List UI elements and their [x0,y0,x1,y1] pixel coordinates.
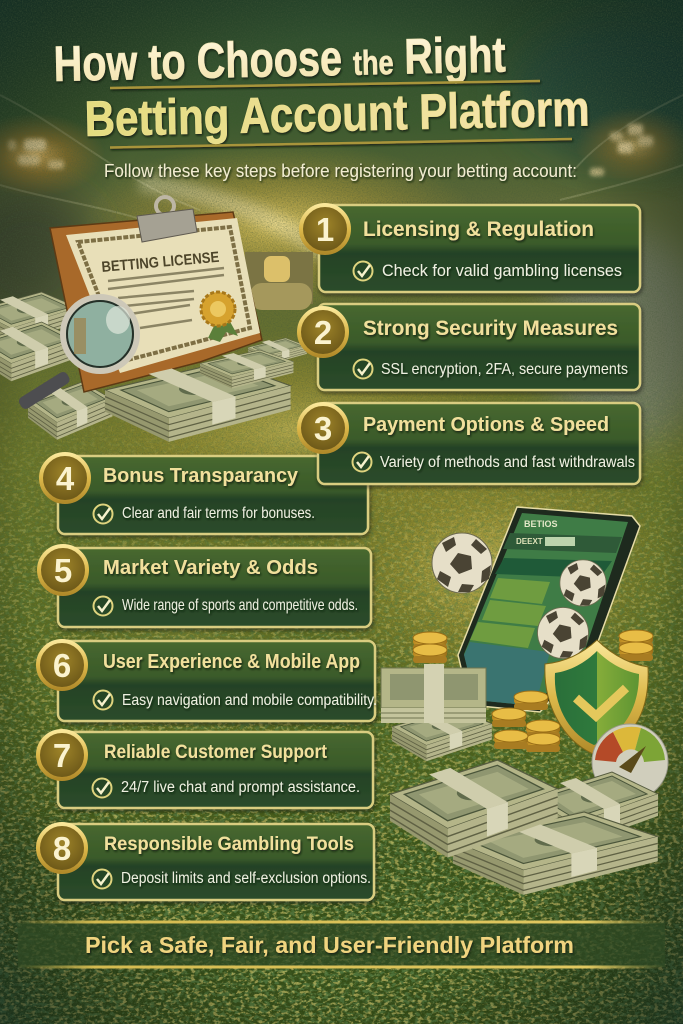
illustration: betting license with money [0,197,313,442]
license document [66,218,260,373]
money stack beside coins [381,664,492,761]
detail 1: Check for valid gambling licenses [382,262,622,280]
panel 5 [58,548,371,627]
gold seal [201,292,238,342]
heading 4: Bonus Transparancy [103,464,299,487]
detail 2: SSL encryption, 2FA, secure payments [381,361,628,378]
step 3 [299,403,640,484]
badge 5: 5 [54,552,72,589]
badge 6: 6 [53,647,71,684]
heading 3: Payment Options & Speed [363,413,609,436]
money stacks left [0,292,307,440]
heading 1: Licensing & Regulation [363,218,594,241]
speed gauge [592,724,668,800]
check 6 [94,690,112,710]
panel 2 [318,304,640,390]
check 8 [92,870,112,888]
detail 5: Wide range of sports and competitive odds. [122,597,358,614]
stadium lights [0,95,683,225]
check 5 [94,596,112,616]
scroll behind license [245,252,313,310]
subtitle: Follow these key steps before registering your betting account: [104,161,577,181]
step 5 [39,546,371,627]
badge 1: 1 [316,211,334,248]
detail 3: Variety of methods and fast withdrawals [380,454,635,471]
step 4 [41,454,368,534]
heading 2: Strong Security Measures [363,317,618,340]
step 1 [301,205,640,292]
footer banner [17,922,665,967]
heading 8: Responsible Gambling Tools [104,833,354,855]
badge 2: 2 [314,314,332,351]
phone: DEEXT [516,537,543,546]
badge 3 [299,404,347,452]
check 7 [92,778,112,798]
phone [458,507,640,712]
step 6 [38,641,377,721]
badge 4: 4 [56,460,75,497]
coin stacks [413,630,653,752]
soccer balls [432,533,606,658]
panel 6 [58,641,375,721]
detail 7: 24/7 live chat and prompt assistance. [121,779,360,796]
magnifying glass [17,297,137,411]
badge 7 [38,731,86,779]
detail 6: Easy navigation and mobile compatibility. [122,692,377,709]
footer banner: Pick a Safe, Fair, and User-Friendly Platform [85,932,574,958]
badge 8: 8 [53,830,71,867]
clipboard [50,212,262,392]
badge 5 [39,546,87,594]
shield with check [545,640,648,754]
step 2 [299,304,640,390]
check 4 [94,504,112,524]
title: Betting Account Platform [84,80,590,147]
illustration: phone, shield, coins and money [381,507,668,895]
license document: BETTING LICENSE [101,249,220,276]
heading 7: Reliable Customer Support [104,741,327,763]
title: How to Choose the Right [53,27,506,92]
check 2 [354,360,372,378]
badge 6 [38,641,86,689]
step 8 [38,824,374,900]
badge 8 [38,824,86,872]
phone: BETIOS [524,519,558,529]
badge 1 [301,205,349,253]
front money stack [105,350,293,442]
check 3 [352,452,372,472]
badge 3: 3 [314,410,332,447]
check 1 [354,262,372,280]
panel 7 [58,732,373,808]
badge 7: 7 [53,737,71,774]
panel 3 [318,403,640,484]
step 7 [38,731,373,808]
panel 1 [319,205,640,292]
badge 2 [299,308,347,356]
panel 4 [58,456,368,534]
clip [137,197,197,242]
money stacks bottom [390,760,658,895]
heading 5: Market Variety & Odds [103,556,318,579]
detail 8: Deposit limits and self-exclusion options. [121,870,371,887]
panel 8 [58,824,374,900]
badge 4 [41,454,89,502]
title [53,27,590,147]
heading 6: User Experience & Mobile App [103,650,360,673]
detail 4: Clear and fair terms for bonuses. [122,505,315,522]
